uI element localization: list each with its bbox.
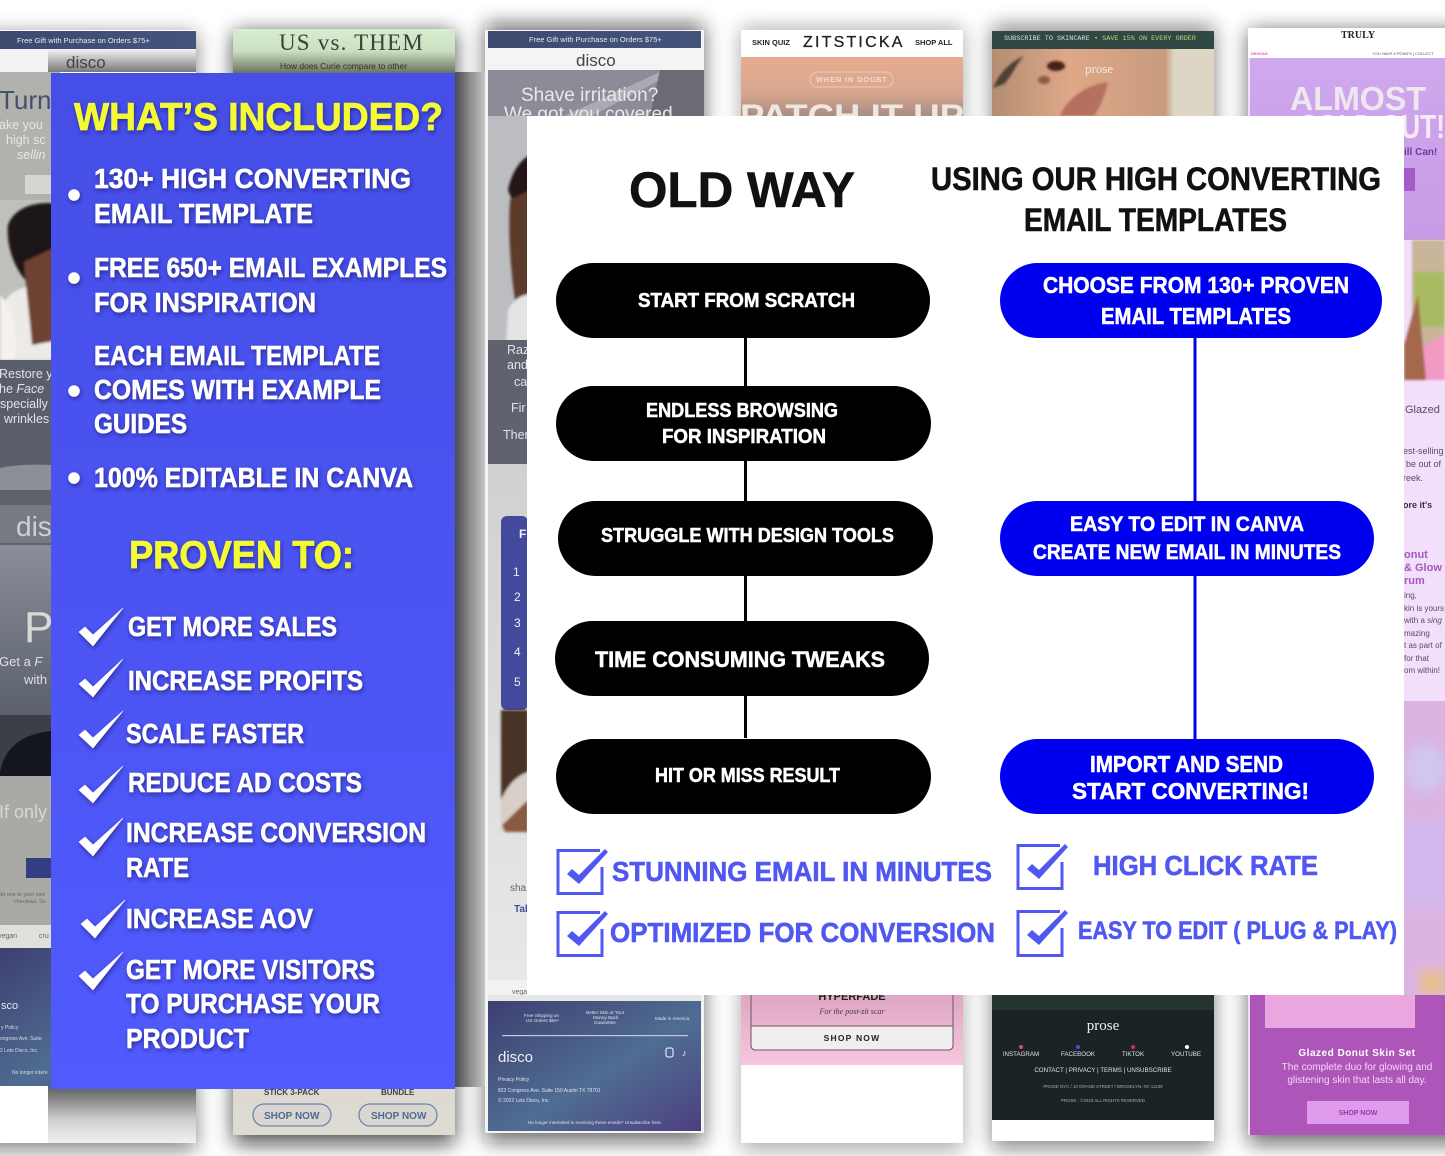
bullet list: included items: FREE 650+ EMAIL EXAMPLES — [94, 252, 447, 283]
panel: what's included — [51, 73, 455, 1089]
step: easy to edit: CREATE NEW EMAIL IN MINUTES — [1033, 541, 1341, 564]
card: disco shave: Tal — [514, 904, 528, 915]
card: disco shave: sha — [510, 883, 527, 894]
card: disco shave: Privacy Policy — [498, 1077, 530, 1083]
card: disco shave: disco — [576, 51, 616, 70]
card: truly: SHOP NOW — [1339, 1110, 1378, 1117]
heading: old way: OLD WAY — [629, 162, 855, 218]
bullet list: included items — [68, 163, 447, 493]
card: disco shave: Free Shipping on — [524, 1013, 559, 1018]
card: disco shave: disco — [498, 1049, 533, 1066]
panel: comparison — [527, 116, 1404, 995]
card: prose: CONTACT | PRIVACY | TERMS | UNSUBSCRIBE — [1034, 1067, 1172, 1074]
card: disco shave: vegan — [512, 989, 531, 996]
heading: proven to: PROVEN TO: — [129, 534, 354, 577]
card: us vs them back: US vs. THEM — [279, 30, 424, 55]
step: choose from templates: EMAIL TEMPLATES — [1101, 303, 1291, 329]
card: disco shave: ♪ — [682, 1048, 686, 1058]
card: prose: TIKTOK — [1122, 1051, 1145, 1058]
checklist: proven results: GET MORE VISITORS — [126, 954, 375, 985]
step: struggle with design tools — [558, 501, 933, 576]
card: disco shave: We got you covered — [504, 104, 673, 125]
card: disco shave: 1 — [513, 565, 520, 579]
card: disco shave: 2 — [514, 590, 521, 604]
checklist: proven results: REDUCE AD COSTS — [128, 767, 362, 798]
card: disco shave: and — [507, 358, 528, 372]
step: start from scratch: START FROM SCRATCH — [638, 290, 855, 312]
bullet list: included items: 130+ HIGH CONVERTING — [94, 163, 411, 194]
card: disco shave: Made in America — [655, 1016, 690, 1021]
card: truly: mazing — [1404, 629, 1430, 638]
card: truly: Glazed — [1405, 404, 1440, 416]
card: disco shave: Free Gift with Purchase on Orders $75+ — [529, 35, 662, 44]
card: prose: PROSE - ©2023 ALL RIGHTS RESERVED — [1061, 1098, 1145, 1103]
card: truly: TRULY — [1341, 30, 1376, 41]
step: time consuming tweaks — [555, 621, 929, 696]
checklist: proven results: TO PURCHASE YOUR — [126, 988, 380, 1019]
card: prose: FACEBOOK — [1061, 1051, 1096, 1058]
step: easy to edit — [1000, 501, 1374, 576]
checklist: proven results: INCREASE AOV — [126, 903, 313, 934]
heading: what's included: WHAT’S INCLUDED? — [74, 96, 443, 139]
card: disco shave: 4 — [514, 645, 521, 659]
step: hit or miss result: HIT OR MISS RESULT — [655, 765, 840, 787]
card: disco turn back: wrinkles — [3, 412, 49, 426]
card: truly: YOU HAVE 8 POINTS | COLLECT — [1372, 51, 1434, 56]
card: truly: t as part of — [1404, 641, 1443, 650]
heading: using our templates: USING OUR HIGH CONVERTING — [931, 161, 1381, 197]
card: disco turn back: sellin — [17, 148, 46, 162]
card: truly: reek. — [1403, 473, 1423, 483]
card: truly: rum — [1404, 575, 1425, 587]
checklist: proven results: RATE — [126, 852, 189, 883]
card: disco turn back: sco — [1, 1000, 18, 1012]
card: disco turn back: dd one to your cart — [0, 892, 45, 898]
card: disco turn back: checkout. Su — [14, 899, 46, 905]
card: disco turn back: disco — [66, 53, 106, 72]
step: easy to edit: EASY TO EDIT IN CANVA — [1070, 513, 1304, 536]
card: prose: INSTAGRAM — [1003, 1051, 1039, 1058]
card: truly: The complete duo for glowing and — [1282, 1062, 1432, 1073]
card: truly: with a sing — [1403, 616, 1442, 625]
step: struggle with design tools: STRUGGLE WITH DESIGN TOOLS — [601, 525, 894, 547]
card: disco turn back: Free Gift with Purchase on Orders $75+ — [17, 36, 150, 45]
card: zitsticka: WHEN IN DOUBT — [816, 75, 888, 84]
card: truly: kin is yours — [1404, 604, 1444, 613]
card: disco shave: No longer interested in receiving these emails? Unsubscribe here. — [528, 1120, 662, 1125]
card: truly: be out of — [1406, 459, 1442, 469]
checklist: proven results: GET MORE SALES — [128, 611, 337, 642]
card: prose: SUBSCRIBE TO SKINCARE — [1004, 35, 1090, 43]
card: zitsticka: SHOP ALL — [915, 38, 953, 47]
card: zitsticka: For the post-zit scar — [818, 1007, 885, 1016]
card: truly: est-selling — [1403, 446, 1444, 456]
card: truly: onut — [1404, 549, 1428, 561]
card: disco shave: Money Back — [593, 1015, 619, 1020]
card: us vs them back: SHOP NOW — [371, 1111, 427, 1122]
card: disco turn back: Turn — [0, 85, 52, 115]
step: start from scratch — [556, 263, 930, 338]
bullet list: included items: GUIDES — [94, 408, 187, 439]
card: zitsticka: ZITSTICKA — [803, 34, 905, 51]
card: us vs them back — [233, 29, 455, 1135]
card: disco shave — [485, 30, 704, 1133]
card: truly: glistening skin that lasts all day. — [1287, 1075, 1427, 1086]
card: truly: DEVKAS — [1251, 51, 1268, 56]
card: zitsticka: HYPERFADE — [818, 991, 886, 1003]
card: disco turn back: he Face — [0, 382, 44, 396]
card: disco turn back: 2 Lets Disco, Inc. — [0, 1048, 38, 1054]
card: truly: & Glow — [1404, 562, 1442, 574]
card: disco turn back: P — [24, 603, 53, 652]
benefit: easy to edit — [1018, 910, 1397, 956]
flow: new way — [1000, 263, 1382, 814]
card: disco shave: F — [519, 527, 526, 541]
checklist: proven results: INCREASE CONVERSION — [126, 817, 426, 848]
card: disco turn back: cru — [39, 933, 49, 940]
heading: using our templates — [931, 161, 1381, 238]
card: disco turn back: ake you — [0, 118, 43, 132]
card: disco shave: © 2022 Lets Disco, Inc. — [498, 1097, 550, 1104]
card: disco turn back: dis — [16, 511, 52, 542]
card: prose: YOUTUBE — [1171, 1051, 1201, 1058]
card: truly: for that — [1404, 654, 1430, 663]
card: truly: ing, — [1404, 591, 1417, 600]
checklist: proven results: SCALE FASTER — [126, 718, 304, 749]
shadow: right of left panel — [455, 72, 485, 1087]
card: disco turn back: ongress Ave. Suite — [0, 1036, 42, 1042]
checklist: proven results: INCREASE PROFITS — [128, 665, 363, 696]
benefit: optimized — [558, 911, 995, 956]
card: prose — [992, 31, 1214, 1141]
bullet list: included items: EMAIL TEMPLATE — [94, 198, 313, 229]
card: disco turn back: No longer intere — [12, 1070, 48, 1076]
step: import and send: IMPORT AND SEND — [1090, 751, 1283, 777]
card: disco shave: Fir — [511, 401, 526, 415]
card: disco turn back — [0, 30, 196, 1143]
card: disco shave: 823 Congress Ave. Suite 150 Austin TX 78701 — [498, 1088, 601, 1094]
card: truly — [1248, 28, 1445, 1135]
card: us vs them back: SHOP NOW — [264, 1111, 320, 1122]
card: disco shave: 3 — [514, 616, 521, 630]
step: choose from templates — [1000, 263, 1382, 338]
bullet list: included items: EACH EMAIL TEMPLATE — [94, 340, 380, 371]
card: truly: ill Can! — [1404, 147, 1437, 158]
card: disco shave: Better Skin or Your — [586, 1010, 625, 1015]
benefit: easy to edit: EASY TO EDIT ( PLUG & PLAY) — [1078, 917, 1397, 945]
card: zitsticka — [740, 30, 964, 1143]
card: disco shave: Ther — [503, 428, 529, 442]
card: prose: prose — [1085, 61, 1113, 76]
bullet list: included items: COMES WITH EXAMPLE — [94, 374, 381, 405]
step: endless browsing: ENDLESS BROWSING — [646, 400, 838, 422]
card: disco shave: US Orders $50+ — [526, 1018, 560, 1023]
card: disco shave: Raz — [507, 343, 529, 357]
card: disco turn back: Restore y — [0, 367, 53, 381]
bullet list: included items: FOR INSPIRATION — [94, 287, 316, 318]
checklist: proven results — [79, 608, 426, 1054]
card: disco turn back: with — [23, 672, 47, 687]
card: prose: prose — [1087, 1018, 1120, 1034]
card: disco turn back: y Policy — [1, 1025, 19, 1031]
checklist: proven results: PRODUCT — [126, 1023, 249, 1054]
bullet list: included items: 100% EDITABLE IN CANVA — [94, 462, 413, 493]
card: zitsticka: SKIN QUIZ — [752, 38, 790, 47]
benefit: stunning email — [558, 849, 992, 894]
benefit: high click rate: HIGH CLICK RATE — [1093, 850, 1318, 881]
heading: using our templates: EMAIL TEMPLATES — [1024, 202, 1287, 238]
step: time consuming tweaks: TIME CONSUMING TWEAKS — [595, 647, 885, 672]
card: truly: ALMOST — [1290, 80, 1426, 117]
step: hit or miss result — [556, 739, 931, 814]
card: us vs them back: BUNDLE — [381, 1088, 415, 1097]
card: disco shave: 5 — [514, 675, 521, 689]
card: zitsticka: PATCH IT UP — [740, 98, 964, 134]
step: import and send: START CONVERTING! — [1072, 778, 1309, 804]
benefit: optimized: OPTIMIZED FOR CONVERSION — [610, 917, 995, 948]
card: us vs them back: How does Curie compare to other — [280, 61, 407, 71]
card: prose: • SAVE 15% ON EVERY ORDER — [1094, 35, 1196, 43]
step: endless browsing: FOR INSPIRATION — [662, 426, 826, 448]
card: disco shave: ca — [514, 375, 527, 389]
benefit: stunning email: STUNNING EMAIL IN MINUTES — [612, 856, 992, 887]
benefit: high click rate — [1018, 844, 1318, 888]
card: disco turn back: Get a F — [0, 654, 43, 669]
card: disco shave: Shave irritation? — [521, 85, 658, 106]
step: endless browsing — [556, 386, 931, 461]
card: disco turn back: high sc — [6, 133, 46, 147]
card: truly: ore it's — [1403, 500, 1432, 510]
card: disco turn back: specially — [0, 397, 49, 411]
step: choose from templates: CHOOSE FROM 130+ PROVEN — [1043, 272, 1349, 298]
flow: old way — [555, 263, 933, 814]
card: truly: om within! — [1404, 666, 1440, 675]
card: us vs them back: STICK 3-PACK — [264, 1088, 320, 1097]
card: prose: PROSE NYC / 10 GRAND STREET / BROOKLYN, NY 11249 — [1043, 1084, 1163, 1089]
step: import and send — [1000, 739, 1374, 814]
card: truly: Glazed Donut Skin Set — [1298, 1048, 1416, 1059]
card: disco shave: Guarantee — [594, 1020, 616, 1025]
card: disco turn back: If only — [0, 802, 47, 822]
card: zitsticka: SHOP NOW — [824, 1033, 880, 1043]
